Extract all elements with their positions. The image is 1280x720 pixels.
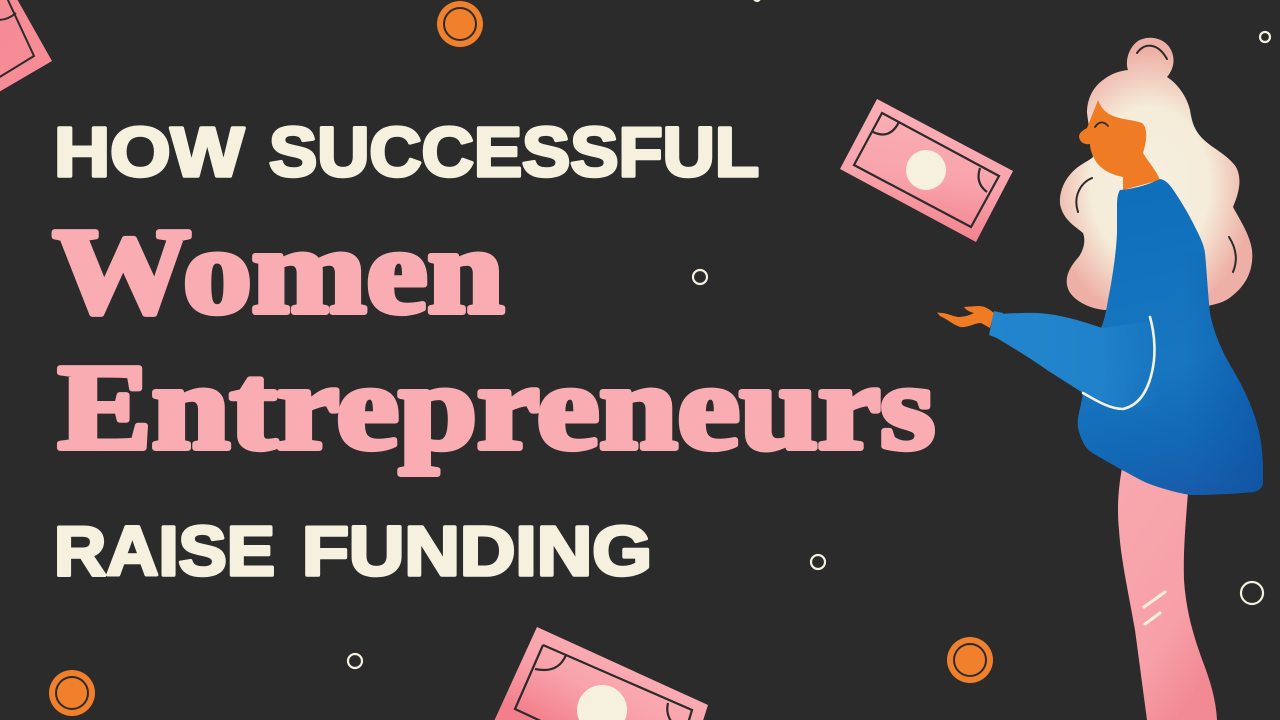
leg marks (1144, 592, 1165, 624)
sleeve crease (1083, 317, 1154, 409)
title line: HOW SUCCESSFUL: SUCCESSFUL (269, 113, 759, 191)
decorative rings (348, 0, 1270, 668)
title line: RAISE FUNDING: RAISE (54, 512, 275, 590)
illustration: woman (937, 38, 1263, 720)
sleeve cuff (989, 311, 1003, 338)
title line: RAISE FUNDING: FUNDING (302, 512, 652, 590)
hand (937, 306, 994, 328)
face and neck (1079, 100, 1160, 190)
title line: Women: Women (53, 204, 504, 339)
coin: bottom right (947, 637, 993, 683)
dress (1078, 179, 1263, 495)
coin: bottom left (49, 670, 95, 716)
sleeve (995, 313, 1160, 409)
coin: top (437, 1, 483, 47)
dress shading (1185, 253, 1263, 495)
banknote: bottom centre (490, 627, 708, 720)
closed eye (1095, 122, 1108, 127)
title line: RAISE FUNDING (54, 512, 652, 590)
banknote: top left (0, 0, 52, 92)
title line: HOW SUCCESSFUL (54, 113, 759, 191)
title line: HOW SUCCESSFUL: HOW (54, 113, 244, 191)
title line: Entrepreneurs: Entrepreneurs (58, 340, 935, 475)
banknote: upper centre (840, 99, 1013, 242)
leg (1118, 468, 1217, 720)
hair (1060, 38, 1252, 310)
hair strands (1076, 46, 1236, 272)
